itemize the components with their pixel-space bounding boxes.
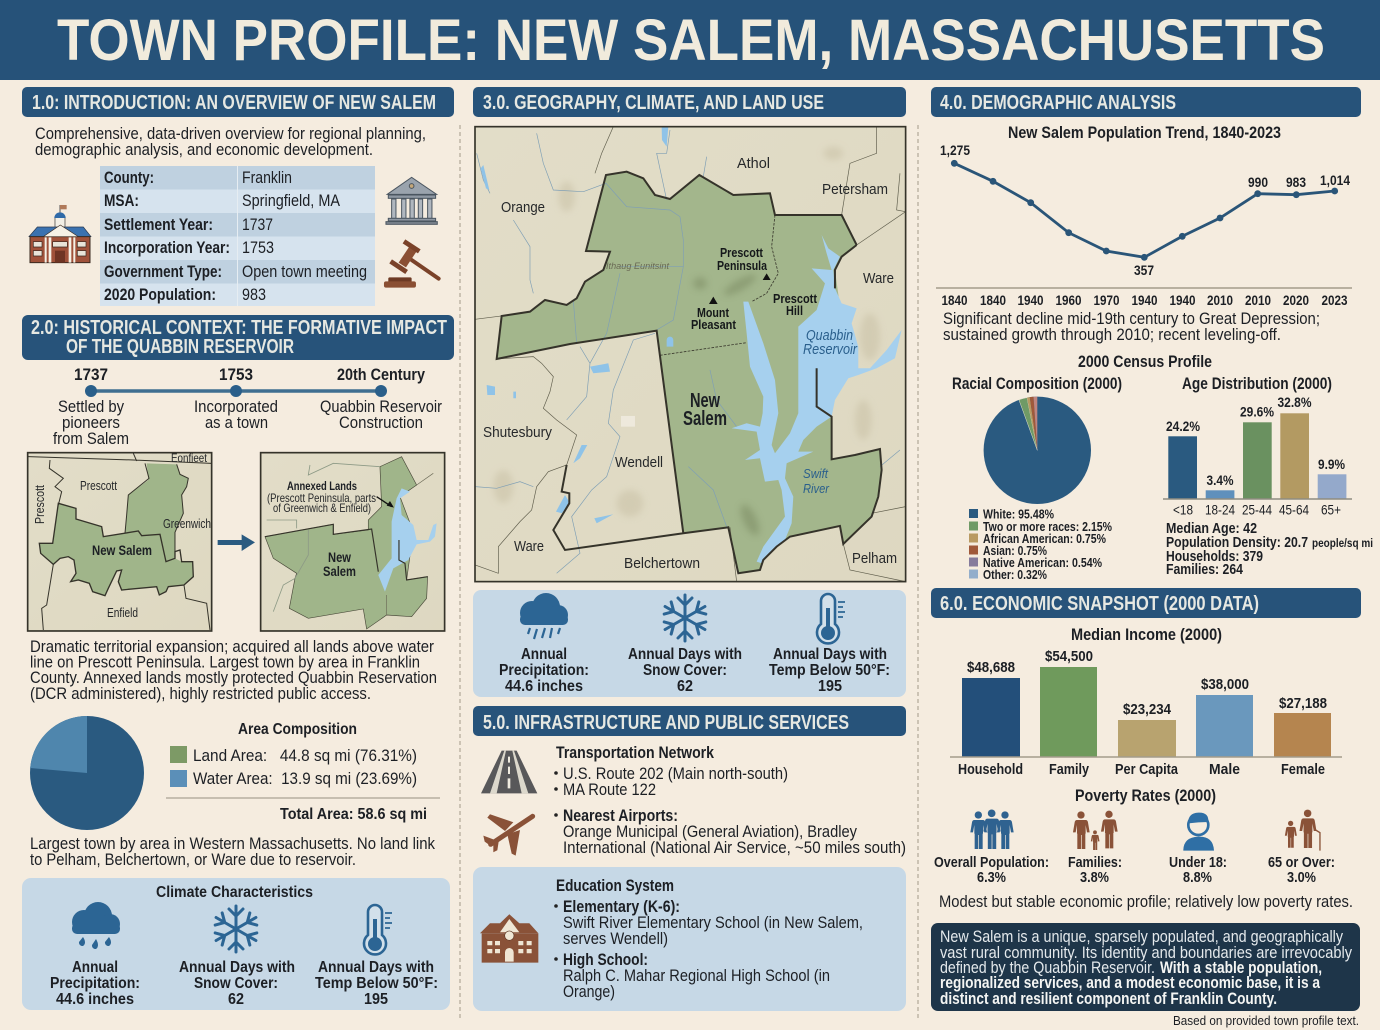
legend: area composition: Total Area: 58.6 sq mi: [280, 806, 427, 823]
census headings: Racial Composition (2000): [952, 374, 1122, 393]
timeline: Settled by: [58, 397, 124, 416]
icon: under 18: [1183, 813, 1214, 851]
line chart: population trend: 1970: [1094, 292, 1120, 308]
bar chart: median income: $38,000: [1201, 676, 1249, 693]
census key stats: Families: 264: [1166, 561, 1244, 578]
bar chart: age distribution: <18: [1173, 501, 1193, 517]
bar chart: median income: $54,500: [1045, 648, 1093, 665]
icon: 65 or over: [1285, 810, 1320, 851]
line chart: population trend: [936, 123, 1352, 308]
bar chart: age distribution: 3.4%: [1206, 472, 1234, 488]
climate stats: Annual Days with: [179, 959, 295, 976]
climate stats: [499, 646, 890, 695]
line chart: population trend: 990: [1248, 174, 1268, 190]
line chart: population trend: 2020: [1283, 292, 1309, 308]
climate stats: 62: [228, 991, 244, 1008]
expansion description: [30, 637, 437, 703]
bar chart: median income: Family: [1049, 761, 1090, 778]
climate stats: 44.6 inches: [505, 678, 583, 695]
climate stats: Precipitation:: [499, 662, 589, 679]
map: New Salem and surroundings: New: [690, 390, 720, 412]
line chart: population trend: 2010: [1207, 292, 1233, 308]
icon: snowflake: [213, 906, 259, 952]
bar chart: median income: Household: [958, 761, 1023, 778]
census headings: [952, 352, 1332, 393]
bar chart: age distribution: 9.9%: [1318, 456, 1345, 472]
education text: serves Wendell): [563, 929, 668, 948]
census key stats: Median Age: 42: [1166, 520, 1257, 537]
icon: overall population: [970, 809, 1014, 849]
bar chart: median income: [950, 625, 1342, 778]
heading: section 1.0: [22, 87, 454, 117]
line chart: population trend: 1940: [1132, 292, 1158, 308]
timeline: Incorporated: [194, 397, 278, 416]
expansion description: Dramatic territorial expansion; acquired all lands above water: [30, 637, 434, 656]
transportation text: International (National Air Service, ~50 miles south): [563, 838, 906, 857]
heading: section 5.0: [473, 706, 906, 736]
timeline: pioneers: [62, 413, 120, 432]
town facts table: Government Type:: [104, 262, 222, 281]
poverty stats: 3.8%: [1080, 869, 1109, 886]
map: New Salem and surroundings: Quabbin: [806, 327, 853, 344]
expansion description: County. Annexed lands mostly protected Quabbin Reservation: [30, 668, 437, 687]
heading: section 3.0: 3.0. GEOGRAPHY, CLIMATE, AND LAND USE: [483, 92, 824, 114]
map: New Salem and surroundings: Athol: [737, 155, 770, 172]
map: New Salem and surroundings: Ware: [514, 538, 544, 555]
climate stats: 195: [818, 678, 842, 695]
heading: section 6.0: [931, 588, 1361, 618]
intro text: demographic analysis, and economic development.: [35, 140, 373, 159]
climate stats: Snow Cover:: [643, 662, 727, 679]
heading: section 6.0: 6.0. ECONOMIC SNAPSHOT (2000 DATA): [940, 593, 1259, 615]
line chart: population trend: 357: [1134, 262, 1154, 278]
timeline: Quabbin Reservoir: [320, 397, 442, 416]
line chart: population trend: New Salem Population Trend, 1840-2023: [1008, 123, 1281, 142]
poverty stats: Overall Population:: [934, 854, 1049, 871]
town facts table: Franklin: [242, 168, 292, 187]
bar chart: median income: $23,234: [1123, 701, 1172, 718]
source note: Based on provided town profile text.: [1173, 1013, 1359, 1028]
line chart: population trend: 1940: [1018, 292, 1044, 308]
timeline: from Salem: [53, 429, 129, 448]
census key stats: Population Density: 20.7: [1166, 534, 1308, 551]
icon: rain cloud: [520, 593, 568, 639]
climate stats: 62: [677, 678, 693, 695]
map: New Salem and surroundings: Wendell: [615, 454, 663, 471]
expansion description: line on Prescott Peninsula. Largest town by area in Franklin: [30, 652, 420, 672]
map: New Salem and surroundings: Ware: [863, 270, 894, 287]
bar chart: median income: Female: [1281, 761, 1325, 778]
map: after annexation: [261, 453, 445, 631]
icon: town hall: [29, 205, 91, 263]
conclusion callout: [931, 923, 1360, 1011]
map: after annexation: New: [328, 549, 351, 565]
poverty stats: Under 18:: [1169, 854, 1227, 871]
bar chart: age distribution: [1163, 394, 1352, 517]
bar chart: age distribution: 45-64: [1279, 501, 1309, 517]
poverty stats: 8.8%: [1183, 869, 1212, 886]
heading: section 2.0: [22, 315, 454, 360]
education text: Elementary (K-6):: [563, 897, 680, 916]
transportation text: Orange Municipal (General Aviation), Bradley: [563, 822, 857, 841]
map: New Salem and surroundings: Petersham: [822, 181, 888, 198]
icon: rain cloud: [72, 902, 120, 949]
area note: Largest town by area in Western Massachusetts. No land link: [30, 834, 435, 853]
census key stats: Households: 379: [1166, 548, 1263, 565]
line chart: population trend: 1840: [980, 292, 1006, 308]
poverty stats: 65 or Over:: [1268, 854, 1335, 871]
heading: section 4.0: 4.0. DEMOGRAPHIC ANALYSIS: [940, 92, 1176, 114]
climate stats: Temp Below 50°F:: [769, 662, 890, 679]
transportation text: Nearest Airports:: [563, 806, 678, 825]
timeline: 1753: [219, 365, 253, 384]
map: after annexation: Annexed Lands: [287, 479, 357, 493]
transportation text: U.S. Route 202 (Main north-south): [563, 764, 788, 783]
map: New Salem and surroundings: Peninsula: [717, 258, 768, 273]
conclusion callout: With a stable population,: [1160, 958, 1322, 977]
intro text: Comprehensive, data-driven overview for regional planning,: [35, 124, 426, 143]
legend: racial composition: Two or more races: 2.15%: [983, 519, 1112, 534]
line chart: population trend: 1940: [1170, 292, 1196, 308]
poverty rates: Poverty Rates (2000): [1075, 786, 1216, 805]
map: after annexation: (Prescott Peninsula, parts: [267, 491, 376, 505]
climate stats: Snow Cover:: [194, 975, 278, 992]
map: before annexation: [28, 451, 212, 631]
panel: economic snapshot: [931, 588, 1361, 1028]
climate stats: Annual Days with: [628, 646, 742, 663]
transportation text: Transportation Network: [556, 743, 714, 762]
map: before annexation: Greenwich: [163, 516, 211, 531]
icon: families: [1073, 811, 1118, 850]
map: New Salem and surroundings: Belchertown: [624, 555, 700, 572]
bar chart: age distribution: 24.2%: [1166, 418, 1200, 434]
education text: Ralph C. Mahar Regional High School (in: [563, 966, 830, 985]
climate stats: Temp Below 50°F:: [315, 975, 438, 992]
bar chart: age distribution: 65+: [1321, 501, 1341, 517]
bar chart: median income: Male: [1209, 761, 1240, 778]
heading: section 2.0: OF THE QUABBIN RESERVOIR: [66, 336, 294, 358]
timeline: 20th Century: [337, 365, 425, 384]
legend: racial composition: Asian: 0.75%: [983, 543, 1047, 558]
poverty stats: 6.3%: [977, 869, 1006, 886]
map: before annexation: New Salem: [92, 542, 152, 558]
census key stats: [1166, 520, 1373, 578]
panel: infrastructure: [473, 706, 906, 1011]
legend: racial composition: White: 95.48%: [983, 506, 1054, 521]
map: before annexation: Prescott: [80, 478, 117, 493]
icon: school: [480, 914, 538, 963]
map: after annexation: Salem: [323, 563, 356, 579]
poverty stats: [934, 854, 1335, 886]
map: before annexation: Enfield: [107, 605, 138, 620]
line chart: population trend: 1960: [1056, 292, 1082, 308]
map: New Salem and surroundings: Reservoir: [803, 341, 858, 358]
map: New Salem and surroundings: Pelham: [852, 550, 897, 567]
icon: thermometer: [364, 905, 392, 954]
heading: section 4.0: [931, 87, 1361, 117]
census headings: 2000 Census Profile: [1078, 352, 1212, 371]
climate stats: Annual Days with: [773, 646, 887, 663]
bar chart: age distribution: 29.6%: [1240, 404, 1274, 420]
line chart: population trend: 1840: [942, 292, 968, 308]
bar chart: median income: Per Capita: [1115, 761, 1179, 778]
icon: snowflake: [662, 595, 708, 641]
heading: section 5.0: 5.0. INFRASTRUCTURE AND PUBLIC SERVICES: [483, 712, 849, 734]
transportation text: [554, 743, 906, 857]
line chart: population trend: 1,014: [1320, 172, 1350, 188]
area note: [30, 834, 435, 869]
town facts table: 1753: [242, 238, 274, 257]
conclusion callout: defined by the Quabbin Reservoir.: [940, 958, 1155, 977]
town facts table: 2020 Population:: [104, 285, 216, 304]
line chart: population trend: 983: [1286, 174, 1306, 190]
poverty stats: Families:: [1068, 854, 1122, 871]
pie chart: racial composition: [984, 397, 1091, 504]
map: New Salem and surroundings: Orange: [501, 199, 545, 216]
panel: climate characteristics: [22, 878, 450, 1010]
timeline: as a town: [205, 413, 268, 432]
expansion description: (DCR administered), highly restricted public access.: [30, 684, 371, 703]
map: New Salem and surroundings: River: [803, 481, 830, 496]
map: before annexation: Eonfieet: [171, 451, 208, 465]
map: New Salem and surroundings: Prescott: [773, 291, 818, 306]
map: New Salem and surroundings: Prescott: [720, 245, 764, 260]
climate stats: Annual: [521, 646, 567, 663]
legend: area composition: Area Composition: [238, 721, 357, 738]
line chart: population trend: 2010: [1245, 292, 1271, 308]
legend: racial composition: African American: 0.75%: [983, 531, 1106, 546]
trend caption: sustained growth through 2010; recent leveling-off.: [943, 325, 1281, 344]
line chart: population trend: 2023: [1322, 292, 1348, 308]
town facts table: County:: [104, 168, 154, 187]
map: New Salem and surroundings: Ithaug Eunitsint: [606, 261, 670, 271]
icon: gavel: [384, 239, 439, 288]
map: after annexation: of Greenwich & Enfield): [273, 501, 371, 515]
town facts table: Springfield, MA: [242, 191, 341, 210]
bar chart: age distribution: 32.8%: [1278, 394, 1312, 410]
arrow: before to after: [218, 534, 255, 551]
education text: Orange): [563, 982, 615, 1001]
map: New Salem and surroundings: Salem: [683, 408, 727, 430]
panel: education system: [473, 867, 906, 1011]
town facts table: 1737: [242, 215, 273, 234]
climate stats: 44.6 inches: [56, 991, 134, 1008]
climate stats: Annual Days with: [318, 959, 434, 976]
poverty rates: [934, 786, 1353, 911]
timeline: [53, 365, 442, 448]
trend caption: Significant decline mid-19th century to Great Depression;: [943, 309, 1320, 328]
legend: racial composition: [969, 506, 1112, 582]
bar chart: median income: $48,688: [967, 659, 1015, 676]
legend: area composition: Land Area: 44.8 sq mi (76.31%): [193, 746, 417, 765]
map: New Salem and surroundings: [475, 127, 906, 582]
bar chart: median income: $27,188: [1279, 695, 1327, 712]
panel: geography: [473, 87, 906, 697]
icon: road: [481, 751, 537, 793]
heading: section 1.0: 1.0: INTRODUCTION: AN OVERVIEW OF NEW SALEM: [32, 92, 436, 114]
conclusion callout: distinct and resilient component of Franklin County.: [940, 989, 1277, 1008]
legend: area composition: [166, 721, 440, 823]
climate stats: Precipitation:: [50, 975, 140, 992]
icon: government building: [386, 177, 437, 224]
bar chart: age distribution: 25-44: [1242, 501, 1272, 517]
panel: historical context: [22, 315, 454, 1010]
timeline: Construction: [339, 413, 423, 432]
town facts table: [100, 166, 375, 306]
transportation text: MA Route 122: [563, 780, 656, 799]
climate stats: Annual: [72, 959, 118, 976]
line chart: population trend: 1,275: [940, 142, 970, 158]
town facts table: MSA:: [104, 191, 139, 210]
climate stats: [50, 959, 438, 1008]
area note: to Pelham, Belchertown, or Ware due to reservoir.: [30, 850, 356, 869]
town facts table: Open town meeting: [242, 262, 367, 281]
legend: area composition: Water Area: 13.9 sq mi (23.69%): [193, 769, 417, 788]
panel: introduction: [22, 87, 454, 306]
map: New Salem and surroundings: Hill: [786, 303, 803, 318]
panel: demographics: [931, 87, 1373, 582]
intro text: [35, 124, 426, 159]
education text: Swift River Elementary School (in New Salem,: [563, 913, 863, 932]
education text: High School:: [563, 950, 648, 969]
trend caption: [943, 309, 1320, 344]
map: New Salem and surroundings: Shutesbury: [483, 424, 552, 441]
icon: airplane: [483, 814, 533, 856]
pie chart: area composition: [30, 716, 144, 830]
map: before annexation: Prescott: [32, 485, 47, 524]
education text: Education System: [556, 876, 674, 895]
town facts table: Settlement Year:: [104, 215, 213, 234]
legend: racial composition: Native American: 0.54%: [983, 555, 1102, 570]
map: New Salem and surroundings: Mount: [697, 305, 730, 320]
education text: [554, 876, 863, 1001]
town facts table: 983: [242, 285, 266, 304]
panel: climate characteristics: Climate Characteristics: [156, 884, 313, 901]
climate stats: 195: [364, 991, 388, 1008]
legend: racial composition: Other: 0.32%: [983, 567, 1047, 582]
census headings: Age Distribution (2000): [1182, 374, 1332, 393]
bar chart: median income: Median Income (2000): [1071, 625, 1222, 644]
map: New Salem and surroundings: Pleasant: [691, 317, 737, 332]
poverty stats: 3.0%: [1287, 869, 1316, 886]
map: New Salem and surroundings: Swift: [803, 466, 829, 481]
bar chart: age distribution: 18-24: [1205, 501, 1235, 517]
icon: thermometer: [817, 594, 845, 643]
heading: section 2.0: 2.0: HISTORICAL CONTEXT: THE FORMATIVE IMPACT: [31, 317, 447, 339]
town facts table: Incorporation Year:: [104, 238, 230, 257]
timeline: 1737: [74, 365, 108, 384]
panel: climate stats: [473, 590, 906, 697]
